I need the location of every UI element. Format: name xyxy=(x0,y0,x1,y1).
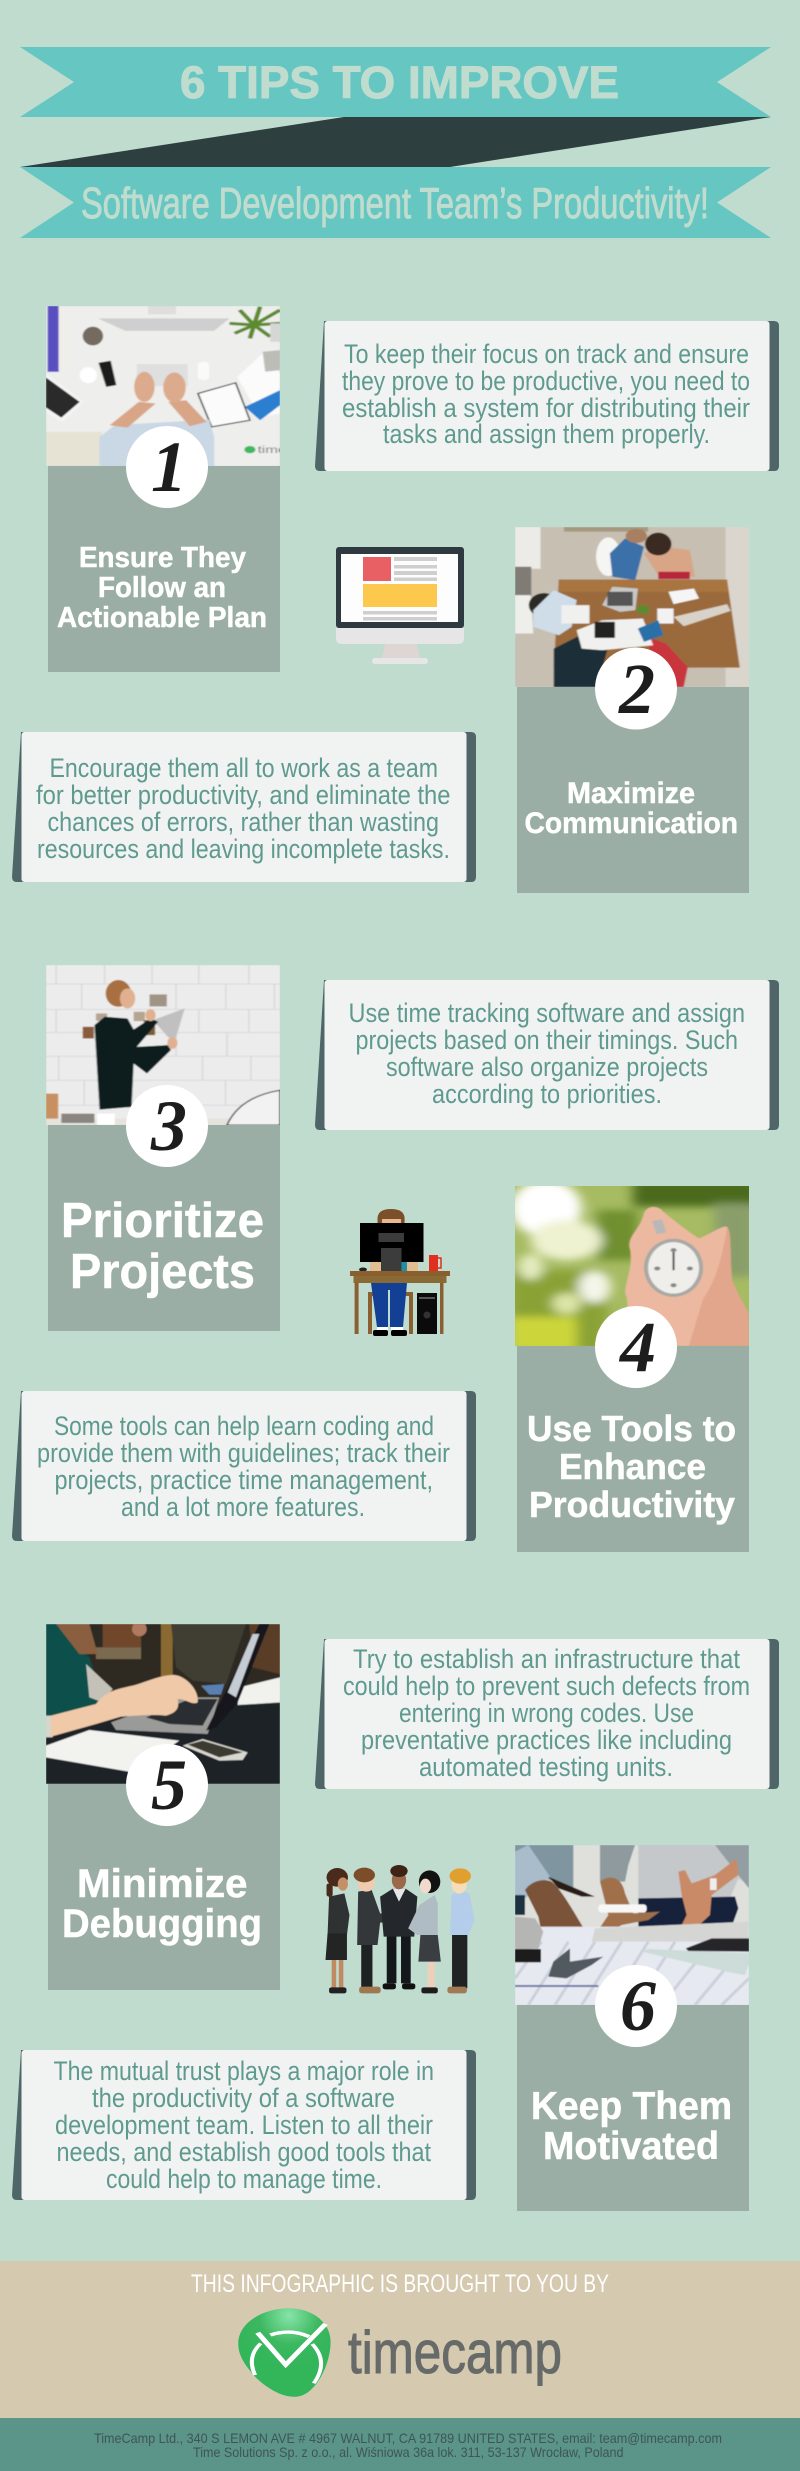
tip 1 title: Follow an xyxy=(98,572,226,604)
number circle 2 xyxy=(595,648,677,730)
tip 3 text box: Use time tracking software and assign xyxy=(348,998,745,1028)
photo: desk from above: timec xyxy=(258,444,295,455)
numeral 3: 3 xyxy=(150,1086,187,1166)
photo: hands over blueprints xyxy=(515,1845,749,2005)
tip 1 title block xyxy=(48,466,280,672)
panel: tip 4 xyxy=(12,1180,760,1552)
tip 5 title block xyxy=(48,1784,280,1990)
title line 1: 6 TIPS TO IMPROVE xyxy=(180,57,619,108)
tip 6 text box xyxy=(12,2050,476,2200)
tip 2 text box: Encourage them all to work as a team xyxy=(50,753,438,783)
tip 2 title xyxy=(524,777,738,840)
photo: desk from above xyxy=(46,306,295,466)
tip 1 text box: tasks and assign them properly. xyxy=(383,419,710,449)
tip 2 text box: chances of errors, rather than wasting xyxy=(48,807,439,837)
tip 6 text box: the productivity of a software xyxy=(92,2083,395,2113)
tip 6 text box: The mutual trust plays a major role in xyxy=(54,2056,434,2086)
tip 4 title: Enhance xyxy=(559,1446,706,1487)
tip 2 text box: for better productivity, and eliminate the xyxy=(36,780,450,810)
numeral 4: 4 xyxy=(618,1307,656,1387)
photo: hands on laptop xyxy=(46,1624,280,1784)
tip 2 title: Communication xyxy=(524,807,738,840)
tip 1 text box xyxy=(315,321,779,471)
tip 6 title: Motivated xyxy=(543,2125,719,2168)
tip 5 text box: automated testing units. xyxy=(419,1752,673,1782)
woman left xyxy=(326,1868,349,1993)
tip 6 text box: could help to manage time. xyxy=(106,2164,382,2194)
panel: tip 1 xyxy=(46,306,779,672)
tip 4 title: Use Tools to xyxy=(527,1408,736,1449)
tip 3 title block xyxy=(48,1125,280,1331)
sponsor line: THIS INFOGRAPHIC IS BROUGHT TO YOU BY xyxy=(191,2270,609,2298)
bottom ribbon xyxy=(20,167,771,238)
panel: tip 6 xyxy=(12,1845,749,2211)
tip 3 title: Prioritize xyxy=(61,1194,264,1248)
tip 4 title xyxy=(527,1408,736,1525)
tip 4 text box: and a lot more features. xyxy=(121,1492,365,1522)
tip 3 text box: projects based on their timings. Such xyxy=(356,1025,738,1055)
photo: man at brick wall xyxy=(46,965,280,1125)
top ribbon xyxy=(20,47,771,117)
numeral 1: 1 xyxy=(151,427,187,507)
tip 3 text box: according to priorities. xyxy=(432,1079,662,1109)
tip 4 text box: provide them with guidelines; track their xyxy=(37,1438,450,1468)
woman fourth xyxy=(408,1870,441,1993)
tip 4 text box xyxy=(12,1391,476,1541)
tip 4 title block xyxy=(517,1346,749,1552)
photo: team at table xyxy=(515,527,749,687)
tip 6 text box: development team. Listen to all their xyxy=(55,2110,433,2140)
number circle 3 xyxy=(126,1085,208,1167)
tip 4 text box: Some tools can help learn coding and xyxy=(54,1411,434,1441)
tip 2 title block xyxy=(517,687,749,893)
icon: desktop monitor xyxy=(336,547,464,664)
banner fold xyxy=(20,117,771,167)
tip 5 text box xyxy=(315,1639,779,1789)
tip 1 title xyxy=(57,542,267,634)
tip 6 title: Keep Them xyxy=(531,2085,732,2128)
footer address band xyxy=(0,2418,800,2471)
tip 5 text box: Try to establish an infrastructure that xyxy=(353,1644,740,1674)
tip 1 text box: establish a system for distributing their xyxy=(342,393,750,423)
tip 2 text box: resources and leaving incomplete tasks. xyxy=(37,834,450,864)
tip 3 title xyxy=(61,1194,264,1299)
tip 5 title: Debugging xyxy=(62,1902,262,1946)
icon: person at desk xyxy=(350,1209,450,1336)
numeral 5: 5 xyxy=(151,1745,187,1825)
numeral 6: 6 xyxy=(620,1966,656,2046)
tip 1 title: Actionable Plan xyxy=(57,602,267,634)
footer address band: TimeCamp Ltd., 340 S LEMON AVE # 4967 WALNUT, CA 91789 UNITED STATES, email: team@timecamp.com xyxy=(94,2430,722,2446)
icon: team of five people xyxy=(326,1865,474,1994)
icon: timecamp logo xyxy=(238,2308,331,2397)
tip 1 title: Ensure They xyxy=(79,542,246,574)
numeral 2: 2 xyxy=(618,649,655,729)
tip 5 title xyxy=(62,1862,262,1946)
panel: tip 3 xyxy=(46,965,779,1331)
man centre xyxy=(380,1865,417,1989)
footer address band: Time Solutions Sp. z o.o., al. Wiśniowa 36a lok. 311, 53-137 Wrocław, Poland xyxy=(193,2444,624,2460)
tip 5 text box: entering in wrong codes. Use xyxy=(399,1698,694,1728)
title banner xyxy=(20,47,771,238)
footer brand band xyxy=(0,2261,800,2418)
panel: tip 5 xyxy=(46,1622,779,1990)
tip 5 text box: preventative practices like including xyxy=(361,1725,732,1755)
tip 6 text box: needs, and establish good tools that xyxy=(56,2137,431,2167)
number circle 1 xyxy=(126,426,208,508)
tip 4 title: Productivity xyxy=(529,1484,735,1525)
tip 6 title block xyxy=(517,2005,749,2211)
tip 6 title xyxy=(531,2085,732,2168)
number circle 4 xyxy=(595,1306,677,1388)
tip 3 title: Projects xyxy=(70,1245,255,1299)
photo: stopwatch in hand xyxy=(515,1186,749,1346)
tip 5 title: Minimize xyxy=(77,1862,247,1906)
number circle 6 xyxy=(595,1965,677,2047)
tip 2 title: Maximize xyxy=(567,777,695,810)
tip 2 text box xyxy=(12,732,476,882)
number circle 5 xyxy=(126,1744,208,1826)
tip 3 text box xyxy=(315,980,779,1130)
man second xyxy=(354,1868,397,1993)
logo wordmark: timecamp xyxy=(348,2319,562,2386)
tip 4 text box: projects, practice time management, xyxy=(54,1465,433,1495)
tip 3 text box: software also organize projects xyxy=(386,1052,708,1082)
panel: tip 2 xyxy=(12,527,749,893)
man right xyxy=(447,1868,474,1993)
